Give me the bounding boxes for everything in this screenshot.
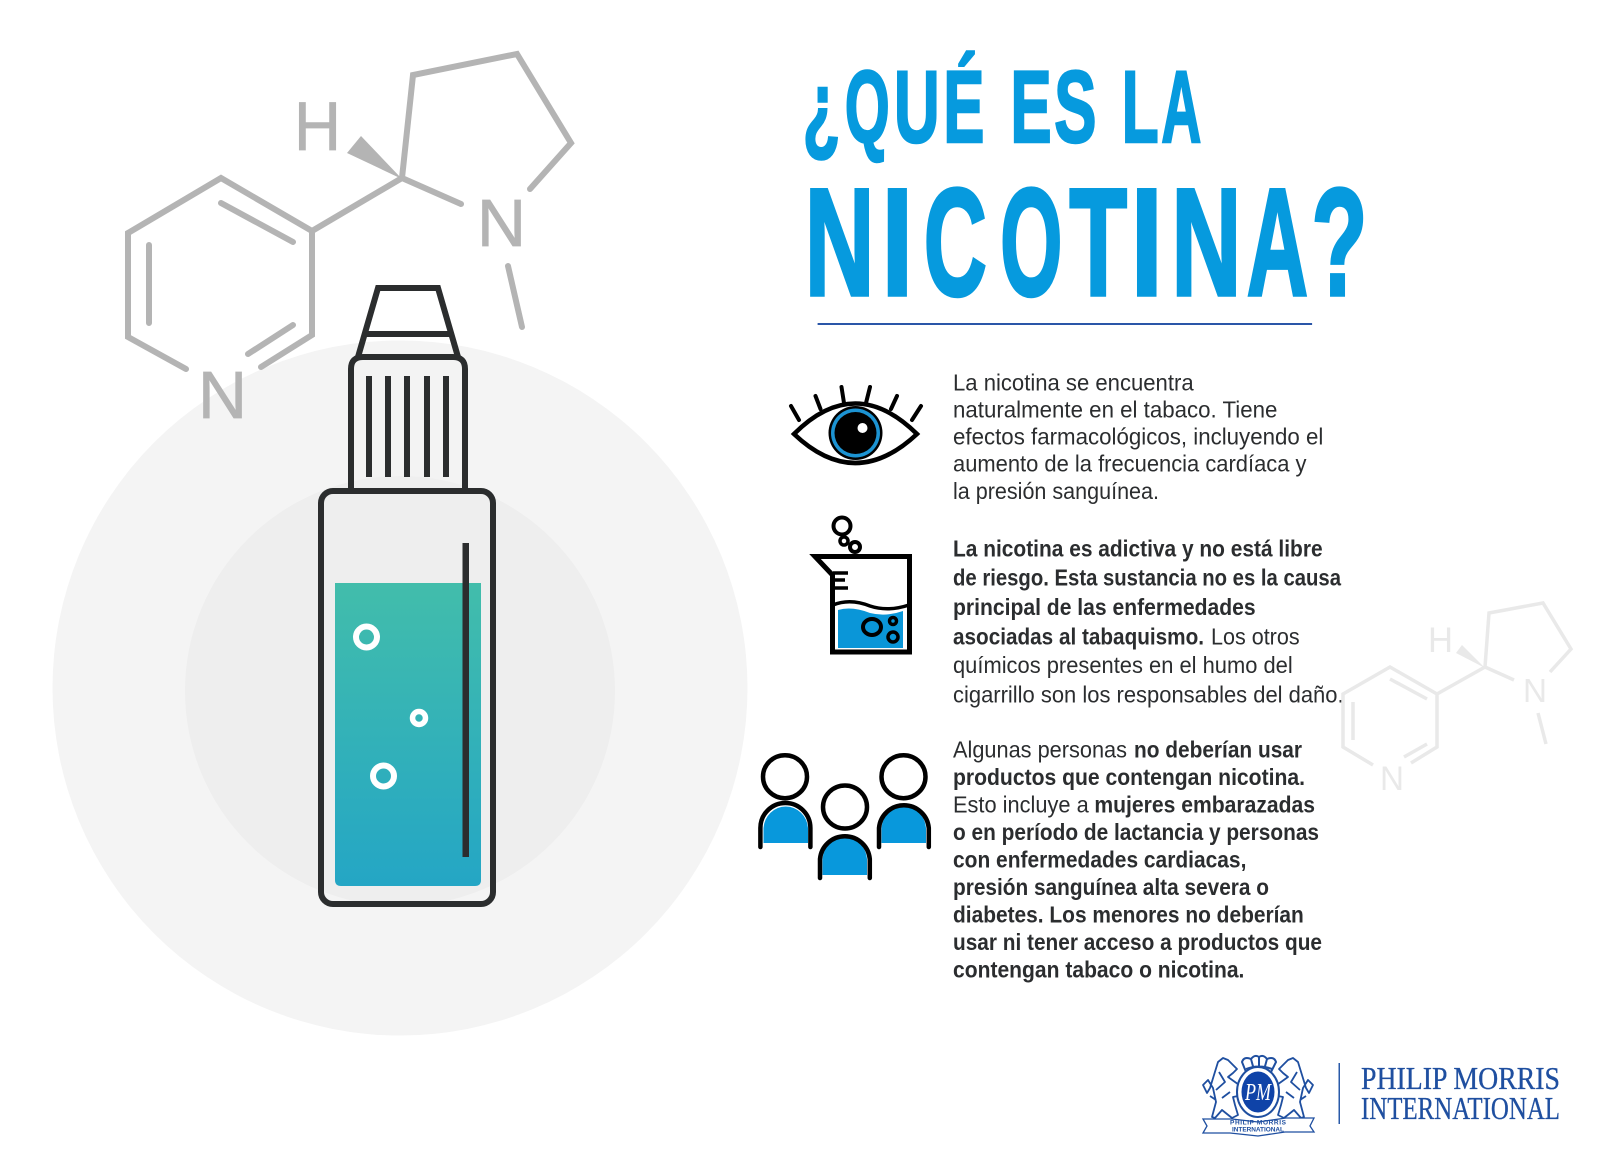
bottle tip [358,288,458,357]
title: ¿ [803,50,840,164]
text block: addiction and risk: Los otros [1211,623,1300,649]
text block: who should not use: no deberían usar [1134,737,1302,763]
dip tube [462,543,469,857]
text block: who should not use: Esto incluye a [953,792,1089,818]
crest: PHILIP MORRIS [1230,1120,1287,1126]
wordmark [1361,1060,1560,1126]
title: N [1171,157,1241,328]
text block: addiction and risk: asociadas al tabaquismo. [953,623,1204,649]
title: A [1247,157,1308,328]
title: É [943,50,984,164]
left lion [1203,1058,1243,1118]
text block: addiction and risk: de riesgo. Esta sustancia no es la causa [953,565,1341,591]
title underline [818,323,1312,325]
icon: eye [791,387,921,463]
nicotine molecule diagram [128,54,571,433]
text block: who should not use: o en período de lactancia y personas [953,819,1319,845]
crown [1242,1056,1276,1072]
text block: what nicotine is: aumento de la frecuencia cardíaca y [953,451,1307,477]
ribbon [1203,1118,1314,1136]
title: L [1122,50,1159,164]
text block: addiction and risk: La nicotina es adictiva y no está libre [953,536,1323,562]
logo: Philip Morris International [1203,1056,1560,1136]
title: E [1010,50,1052,164]
title: T [1069,157,1127,328]
faded nicotine molecule: H [1428,621,1453,660]
text block: who should not use: con enfermedades cardiacas, [953,847,1246,873]
text block: who should not use: usar ni tener acceso a productos que [953,929,1322,955]
text block: addiction and risk [953,536,1344,708]
wordmark: PHILIP MORRIS [1361,1060,1560,1096]
bottle cap with stripes [351,357,465,491]
text block: what nicotine is: la presión sanguínea. [953,478,1159,504]
wordmark: INTERNATIONAL [1361,1090,1560,1126]
nicotine molecule diagram: N [198,358,247,433]
oval emblem [1237,1067,1279,1117]
title: N [805,157,874,328]
text block: who should not use: productos que contengan nicotina. [953,764,1305,790]
text block: what nicotine is: La nicotina se encuentra [953,370,1194,396]
cap stripes [369,376,446,477]
title: I [1130,157,1163,328]
icon: beaker [815,518,910,652]
crest: PM [1244,1080,1273,1106]
title: Q [845,50,890,164]
person right [879,755,929,847]
text block: who should not use: presión sanguínea alta severa o [953,874,1269,900]
title: C [924,157,987,328]
text block: what nicotine is: naturalmente en el tabaco. Tiene [953,397,1277,423]
person middle [820,786,870,878]
bubbles [356,626,426,786]
text block: what nicotine is [953,370,1323,504]
text block: who should not use: contengan tabaco o nicotina. [953,957,1244,983]
nicotine molecule diagram: H [294,88,341,165]
title: S [1054,50,1096,164]
text block: who should not use: diabetes. Los menores no deberían [953,902,1304,928]
title: I [881,157,913,328]
right lion [1273,1058,1313,1118]
title [803,50,1367,328]
title: O [1000,157,1062,328]
text block: addiction and risk: químicos presentes en el humo del [953,652,1293,678]
text block: what nicotine is: efectos farmacológicos, incluyendo el [953,424,1323,450]
text block: who should not use [953,737,1322,983]
liquid [335,583,481,886]
crest [1203,1056,1314,1136]
faded nicotine molecule: N [1523,672,1547,709]
background circles [52,340,748,1036]
text block: who should not use: Algunas personas [953,737,1127,763]
crest: INTERNATIONAL [1232,1126,1284,1134]
person left [760,755,810,847]
text block: addiction and risk: principal de las enfermedades [953,594,1256,620]
title: A [1161,50,1201,164]
nicotine molecule diagram: N [477,186,526,261]
e-liquid dropper bottle [321,288,493,904]
title: ? [1312,157,1367,328]
text block: who should not use: mujeres embarazadas [1094,792,1315,818]
icon: three people [760,755,929,878]
title: U [894,50,940,164]
text block: addiction and risk: cigarrillo son los responsables del daño. [953,682,1344,708]
faded nicotine molecule [1343,603,1571,798]
bottle body [321,491,493,904]
faded nicotine molecule: N [1380,760,1404,798]
